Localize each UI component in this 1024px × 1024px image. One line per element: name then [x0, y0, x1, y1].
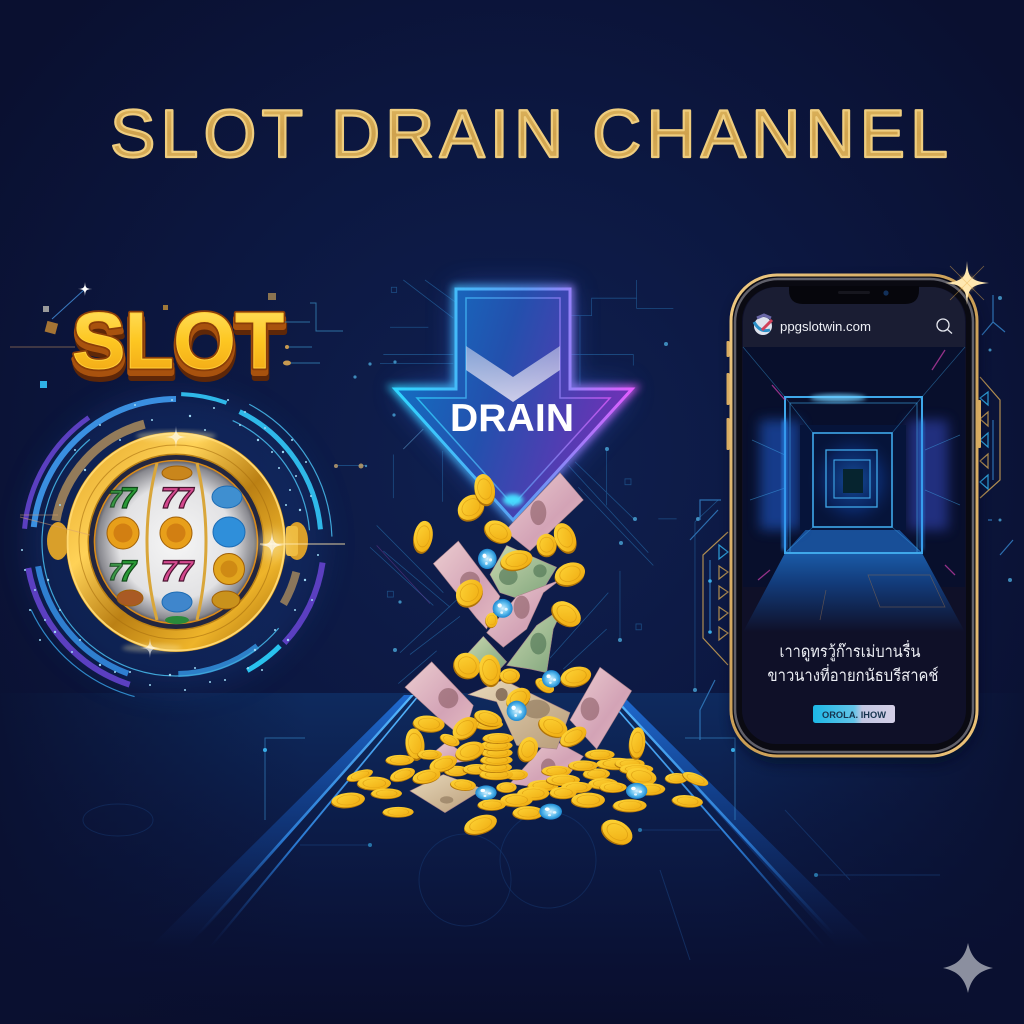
hex frame with triangles right of phone — [980, 295, 1013, 555]
banknotes — [405, 473, 632, 813]
phone corner sparkle — [945, 261, 989, 305]
reel symbols: sevens: 7 — [161, 482, 179, 515]
arrow glow — [395, 289, 632, 520]
title: SLOT DRAIN CHANNEL — [110, 96, 948, 172]
Thai headline — [768, 640, 938, 685]
reel symbols: sevens: 7 — [120, 555, 138, 588]
call to action button: OROLA. IHOW — [822, 710, 887, 721]
reel symbols: sevens: 7 — [161, 555, 179, 588]
watermark star — [943, 943, 993, 993]
gold ring — [66, 432, 286, 652]
phone screen — [742, 287, 966, 744]
SLOT logo text: SLOT — [73, 306, 285, 395]
reel symbols: sevens: 7 — [108, 486, 123, 513]
Thai headline: ขาวนางที่อายกนัธบรีสาคช์ — [768, 664, 938, 685]
money pile — [330, 471, 710, 851]
site header — [743, 287, 965, 347]
side buttons — [726, 341, 730, 357]
ring glints — [20, 426, 345, 658]
phone body — [731, 275, 977, 756]
background dots — [353, 296, 1012, 692]
circuit lines behind the arrow — [337, 280, 718, 689]
call to action button — [813, 705, 895, 723]
confetti and star around SLOT — [10, 282, 343, 468]
search icon — [937, 319, 952, 334]
reel symbols: sevens — [108, 482, 195, 588]
sparkle particles — [21, 399, 319, 691]
banknote portraits — [438, 500, 599, 804]
smartphone — [726, 261, 989, 764]
reel dividers — [147, 463, 157, 620]
drain arrow — [395, 289, 632, 520]
phone shadow — [732, 280, 978, 764]
reel symbols: sevens: 7 — [120, 482, 138, 515]
diamonds — [475, 549, 647, 820]
arrow body — [395, 289, 632, 520]
side knobs — [47, 522, 69, 560]
floor perspective lanes — [83, 695, 940, 960]
falling coins — [411, 471, 593, 714]
SLOT logo text: SLOT — [72, 301, 284, 390]
DRAIN label: DRAIN — [450, 397, 574, 440]
Thai headline: เาาดูทรวู้ก๊ารเม่บานรื่น — [780, 640, 920, 662]
SLOT logo text: SLOT — [72, 296, 284, 385]
slot wheel emblem — [0, 331, 387, 753]
reel window — [95, 461, 257, 623]
site logo icon — [754, 315, 772, 335]
SLOT logo text: SLOT — [72, 296, 284, 385]
hex frame with triangles left of phone — [690, 500, 728, 740]
tunnel illustration — [743, 347, 965, 632]
reel symbols: coins and gems — [107, 466, 244, 609]
reel symbols: sevens: 7 — [108, 559, 123, 586]
reel symbols: sevens: 7 — [177, 482, 195, 515]
reel symbols: sevens: 7 — [177, 555, 195, 588]
chevron — [466, 346, 560, 402]
site domain: ppgslotwin.com — [780, 319, 871, 334]
coin heap — [330, 707, 710, 851]
wheel glow — [26, 392, 326, 692]
neon arcs around wheel — [0, 331, 387, 753]
notch — [789, 286, 919, 304]
tip glow — [503, 494, 523, 506]
